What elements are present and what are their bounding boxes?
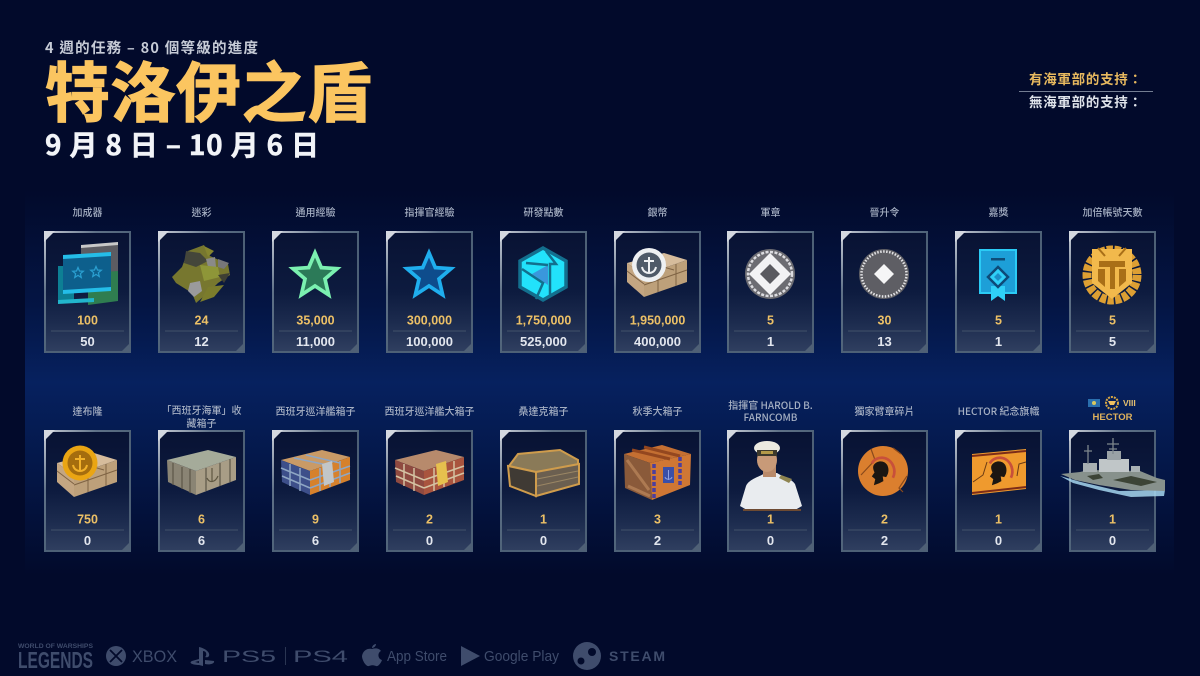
reward with admiralty: 30	[878, 314, 891, 328]
reward without admiralty: 0	[1109, 533, 1116, 548]
ship tier header: HECTOR	[1093, 412, 1133, 423]
reward without admiralty: 1	[995, 334, 1002, 349]
card: research points	[500, 204, 587, 353]
reward with admiralty: 9	[312, 512, 319, 526]
icon: research hexagon	[520, 248, 566, 300]
logo: Steam: STEAM	[609, 648, 665, 664]
card: credits	[614, 204, 701, 353]
reward without admiralty: 2	[654, 533, 661, 548]
icon: grey chest	[167, 450, 236, 495]
card: exclusive patch shard	[841, 403, 928, 552]
reward with admiralty: 1	[540, 512, 547, 526]
logo: PlayStation 4: PS4	[293, 647, 348, 666]
card: Santa chest	[500, 403, 587, 552]
icon: gold framed chest	[508, 450, 579, 496]
icon: orange crate	[624, 445, 691, 500]
icon: red brick chest	[395, 450, 464, 495]
icon: green star	[293, 253, 337, 295]
label: 軍章	[760, 204, 780, 219]
reward without admiralty: 1	[767, 334, 774, 349]
card: Spanish navy collection chest	[158, 402, 245, 552]
icon: doubloon crate	[57, 446, 117, 497]
icon: blue star	[407, 253, 451, 295]
label: 迷彩	[192, 204, 212, 219]
logo: World of Warships Legends	[18, 644, 93, 673]
card: camouflage	[158, 204, 245, 353]
label	[162, 402, 242, 430]
label: 達布隆	[72, 403, 102, 418]
card: Hector ship	[1060, 397, 1165, 552]
logo: App Store: App Store	[387, 648, 447, 665]
reward with admiralty: 2	[881, 512, 888, 526]
legend	[1019, 68, 1153, 111]
label: 指揮官 HAROLD B.	[728, 397, 813, 412]
reward without admiralty: 400,000	[634, 334, 681, 349]
card: commander experience	[386, 204, 473, 353]
card: free experience	[272, 204, 359, 353]
reward with admiralty: 1	[1109, 512, 1116, 526]
card: commander Harold B. Farncomb	[727, 397, 814, 552]
reward with admiralty: 100	[77, 314, 98, 328]
card: boosters	[44, 204, 131, 353]
card: commendation medal	[727, 204, 814, 353]
logo: World of Warships Legends: LEGENDS	[18, 647, 93, 673]
reward without admiralty: 0	[540, 533, 547, 548]
label: 獨家臂章碎片	[854, 403, 914, 418]
reward with admiralty: 1	[767, 512, 774, 526]
icon: blue certificate	[980, 250, 1016, 301]
label: 西班牙巡洋艦大箱子	[384, 403, 474, 418]
label: 研發點數	[524, 204, 564, 219]
icon: brick chest	[281, 450, 350, 495]
ship tier header: VIII	[1123, 398, 1136, 408]
icon: credits crate	[627, 248, 687, 297]
logo: Google Play	[461, 646, 559, 666]
subtitle: 4 週的任務 – 80 個等級的進度	[45, 37, 258, 58]
label: 藏箱子	[186, 415, 216, 430]
reward without admiralty: 0	[426, 533, 433, 548]
card: Spanish cruiser large chest	[384, 403, 474, 552]
central blue band	[25, 190, 1174, 575]
label: 嘉獎	[988, 204, 1008, 219]
label: 「西班牙海軍」收	[162, 402, 242, 417]
reward without admiralty: 525,000	[520, 334, 567, 349]
reward without admiralty: 50	[80, 334, 95, 349]
reward without admiralty: 0	[767, 533, 774, 548]
reward with admiralty: 6	[198, 512, 205, 526]
label: 指揮官經驗	[404, 204, 454, 219]
icon: medal	[745, 249, 795, 299]
reward without admiralty: 13	[877, 334, 892, 349]
reward without admiralty: 0	[84, 533, 91, 548]
card: promotion order	[841, 204, 928, 353]
icon: boosters flags	[58, 242, 118, 305]
reward with admiralty: 300,000	[407, 314, 452, 328]
icon: cracked orange shard	[858, 446, 908, 496]
reward without admiralty: 0	[995, 533, 1002, 548]
reward with admiralty: 1,950,000	[630, 314, 685, 328]
logo: World of Warships Legends: WORLD OF WARSHIPS	[18, 644, 93, 650]
label: FARNCOMB	[744, 409, 798, 424]
reward without admiralty: 6	[198, 533, 205, 548]
legend: without admiralty support: 無海軍部的支持：	[1029, 91, 1142, 111]
date range: 9 月 8 日 – 10 月 6 日	[45, 124, 319, 164]
reward with admiralty: 2	[426, 512, 433, 526]
reward without admiralty: 11,000	[296, 334, 335, 349]
label	[728, 397, 813, 424]
icon: Hector ship	[1060, 438, 1165, 497]
reward with admiralty: 35,000	[296, 314, 335, 328]
ship tier header	[1088, 397, 1136, 423]
reward with admiralty: 3	[654, 512, 661, 526]
label: 加成器	[72, 204, 102, 219]
logo: PlayStation 5: PS5	[222, 647, 276, 666]
label: 桑達克箱子	[518, 403, 568, 418]
reward without admiralty: 5	[1109, 334, 1116, 349]
label: 秋季大箱子	[632, 403, 682, 418]
reward without admiralty: 2	[881, 533, 888, 548]
logo: Google Play: Google Play	[484, 648, 559, 665]
label: 銀幣	[648, 204, 668, 219]
reward with admiralty: 5	[1109, 314, 1116, 328]
header block	[45, 37, 372, 164]
label: 晉升令	[870, 204, 900, 219]
label: 加倍帳號天數	[1082, 204, 1142, 219]
logo: App Store	[362, 644, 447, 666]
card: Spanish cruiser chest	[272, 403, 359, 552]
logo: PlayStation 5	[191, 647, 276, 666]
title: 特洛伊之盾	[45, 41, 372, 135]
reward without admiralty: 6	[312, 533, 319, 548]
icon: camouflage	[172, 245, 230, 303]
reward with admiralty: 1,750,000	[516, 314, 571, 328]
card: doubloons	[44, 403, 131, 552]
logo: Xbox: XBOX	[132, 647, 177, 666]
label: 通用經驗	[296, 204, 336, 219]
reward with admiralty: 5	[995, 314, 1002, 328]
footer logos	[18, 642, 665, 673]
card: commendation certificate	[955, 204, 1042, 353]
reward with admiralty: 1	[995, 512, 1002, 526]
reward with admiralty: 24	[195, 314, 208, 328]
reward with admiralty: 5	[767, 314, 774, 328]
label: 西班牙巡洋艦箱子	[276, 403, 356, 418]
icon: commander portrait	[740, 441, 802, 511]
reward with admiralty: 750	[77, 512, 98, 526]
reward without admiralty: 12	[194, 334, 209, 349]
logo: Xbox	[106, 646, 177, 666]
card: premium days	[1069, 204, 1156, 353]
icon: gold crest	[1087, 248, 1137, 300]
card: autumn large chest	[614, 403, 701, 552]
legend: with admiralty support: 有海軍部的支持：	[1029, 68, 1142, 88]
icon: serrated disc	[859, 249, 909, 299]
card: Hector flag	[955, 403, 1042, 552]
reward without admiralty: 100,000	[406, 334, 453, 349]
icon: Hector commemorative flag	[972, 449, 1026, 495]
label: HECTOR 紀念旗幟	[958, 403, 1039, 418]
logo: Steam	[573, 642, 665, 670]
